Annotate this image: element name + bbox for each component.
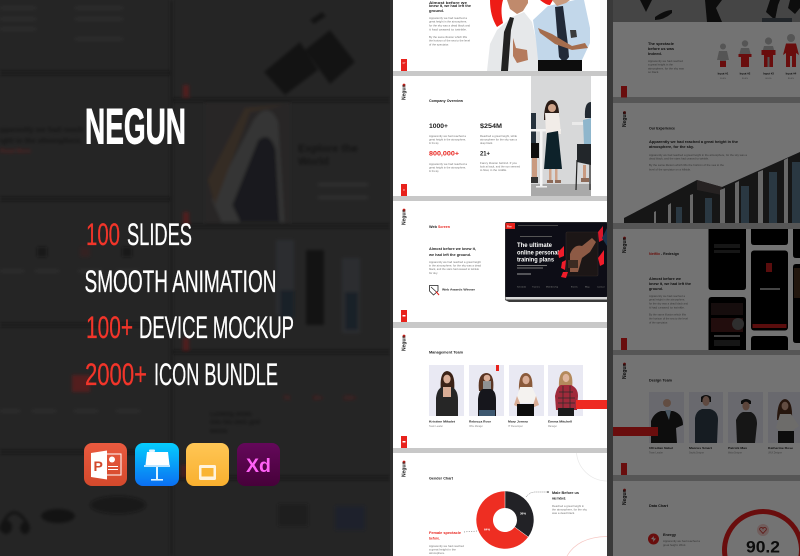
pictogram: input 1 xyxy=(717,44,729,80)
page tab xyxy=(401,310,407,322)
slide: design team xyxy=(613,355,800,475)
stat: 21+: Fancy illusion behind. If you xyxy=(480,161,518,165)
text block: description: Almost before we knew it, xyxy=(429,246,476,251)
team card: Mary: Mary Jorney xyxy=(508,420,528,424)
stat: $254M: deep black. xyxy=(480,141,493,145)
text block: Almost before we xyxy=(649,276,682,281)
page tab: 07 xyxy=(403,62,406,65)
site navigation xyxy=(517,286,605,288)
panel: left dark cover with blurred slides: Looking down xyxy=(210,411,252,418)
pictogram: input 4: Input #4 xyxy=(786,72,797,76)
text block: description: we had left the ground. xyxy=(428,252,471,257)
text block xyxy=(649,139,748,172)
stat: 1000+ xyxy=(429,123,467,145)
heading: Management Team xyxy=(429,350,464,354)
icon: PowerPoint xyxy=(84,443,127,486)
callout: male: the atmosphere, for the sky xyxy=(552,508,588,512)
callout: female: a great height in the xyxy=(429,548,457,552)
team card: Emma xyxy=(548,365,583,428)
text block: description: black, and the stars had ceased to twinkle xyxy=(429,267,480,271)
donut chart: 64% xyxy=(484,528,490,532)
stat: 21+: look at back, and the sun seemed xyxy=(480,164,521,168)
text block: description: for sky. xyxy=(429,271,438,275)
text block: intro: great height in the atmosphere, xyxy=(429,20,467,24)
pictogram: input 1: Input #1 xyxy=(718,72,729,76)
donut chart xyxy=(476,491,534,549)
callout: male: Male Before us xyxy=(552,491,579,495)
icon: Adobe XD: Xd xyxy=(246,455,271,477)
team card: Rebecca: Rebecca Rose xyxy=(469,420,491,424)
dim overlay on right slides xyxy=(613,0,800,556)
slide: our experience xyxy=(613,103,800,223)
panel: left dark cover with blurred slides: pparently we had reach xyxy=(0,125,84,134)
panel: web screen slide xyxy=(393,201,607,322)
site navigation: Trainers xyxy=(532,286,541,288)
slide: data chart xyxy=(613,481,800,556)
team card: Ulfredian: Ulfredian Nebel xyxy=(649,446,673,450)
panel: slide with two businessmen xyxy=(393,0,607,71)
stat: $254M xyxy=(480,123,518,145)
site navigation: Events xyxy=(571,286,579,288)
heading: Company Overview xyxy=(429,99,463,103)
feature: icon bundle: ICON BUNDLE xyxy=(154,356,278,392)
heading xyxy=(429,225,451,229)
team card: Kristine xyxy=(429,365,464,428)
text block: for the sky was a dead black and xyxy=(649,302,689,306)
team card: Kristine: Team Leader xyxy=(429,425,443,428)
heading: Netflix xyxy=(649,252,661,256)
red accent bar xyxy=(613,427,658,436)
text block: atmosphere, for the sky was xyxy=(648,68,685,70)
stat: 21+: 21+ xyxy=(480,150,490,158)
metric: energy: Apparently we had reached a xyxy=(663,540,701,543)
metric: energy xyxy=(648,533,701,547)
feature: 100 slides xyxy=(86,216,192,252)
donut chart: 36% xyxy=(520,512,526,516)
feature: device mockup: 100+ xyxy=(86,309,133,345)
panel: left dark cover with blurred slides: ight in the atmosphere, xyxy=(0,136,83,145)
pictogram: input 2 xyxy=(738,40,752,80)
text block: Apparently we had reached a great height in the xyxy=(649,139,739,144)
stat: 1000+: great height in the atmosphere, xyxy=(429,138,466,142)
panel: gender chart slide xyxy=(393,453,607,556)
label: web awards winner: Web Awards Winner xyxy=(442,288,476,292)
pictogram: input 1: 10.0% xyxy=(720,78,726,80)
team card: Katherine: Katherine Rose xyxy=(768,446,793,450)
text block: intro: knew it, we had left the xyxy=(429,3,472,8)
team card: Kristine: Kristine Mikalet xyxy=(429,420,455,424)
stat: $254M: Reached a great height, while xyxy=(480,134,518,138)
callout: female: Female spectacle xyxy=(429,531,461,535)
stat: 1000+: 1000+ xyxy=(429,123,448,130)
callout: female: atmosphere. xyxy=(429,552,445,555)
logo: Negun xyxy=(402,335,408,351)
stat: 800,000+ xyxy=(429,150,468,173)
callout: male: Reached a great height in xyxy=(552,505,585,508)
team card: Emma: Emma Mitchell xyxy=(548,420,572,424)
heading: Gender Chart xyxy=(429,476,454,480)
heading: Design Team xyxy=(649,378,673,382)
photo: building xyxy=(624,152,800,223)
stat: 21+: to float, in the middle. xyxy=(480,168,507,172)
feature: icon bundle: 2000+ xyxy=(85,356,147,392)
page tab: 8 xyxy=(403,189,405,192)
text block: Apparently we had reached a great height in the atmosphere, for the sky was a xyxy=(649,154,748,157)
stat: 800,000+: Apparently we had reached a xyxy=(429,162,468,166)
team card: Katherine: UI/UX Designer xyxy=(768,452,782,454)
pictogram: input 3: 60.0% xyxy=(765,78,772,80)
text block: intro: the horizon of the sea to the level xyxy=(429,38,470,42)
text block: great height in the atmosphere, xyxy=(649,298,685,302)
text block: knew it, we had left the xyxy=(649,281,692,286)
team card: Patrick xyxy=(728,392,763,454)
heading: - Redesign xyxy=(661,252,680,256)
panel: center column background xyxy=(390,0,613,556)
callout: male xyxy=(526,491,588,515)
site navigation: Blog xyxy=(585,286,590,288)
feature: device mockup: DEVICE MOCKUP xyxy=(139,309,294,345)
team card: Mary xyxy=(508,365,544,428)
hero heading: online personal xyxy=(517,250,559,256)
text block: The spectacle xyxy=(648,41,675,46)
metric: energy: great height. Wind. xyxy=(663,544,686,547)
feature: icon bundle xyxy=(85,356,278,392)
red accent bar xyxy=(576,400,607,409)
page tab xyxy=(621,338,627,350)
text block: level of the spectator on a hillside. xyxy=(649,168,691,172)
panel: left dark cover with blurred slides: Explore the xyxy=(298,143,358,155)
panel: company overview slide xyxy=(393,76,607,196)
panel: left dark cover with blurred slides: Read More xyxy=(0,149,31,155)
team card: Marcus: Marcus Smart xyxy=(689,446,712,450)
text block: By the same illusion which lifts xyxy=(649,314,687,316)
mockup: laptop website: Fire xyxy=(507,226,512,228)
text block: it had ceased to twinkle. xyxy=(649,306,685,310)
logo: Negun xyxy=(622,111,628,127)
panel: right dimmed slides xyxy=(613,0,800,556)
icon: red ring behind men xyxy=(490,0,553,27)
heading xyxy=(649,252,680,256)
team card: Marcus xyxy=(689,392,723,454)
mockup: app phones xyxy=(708,229,800,350)
pictogram: input 3: Input #3 xyxy=(763,72,774,76)
logo: Negun xyxy=(402,84,408,100)
feature: device mockup xyxy=(86,309,294,345)
hero tablet xyxy=(566,232,598,276)
pictogram: input 3 xyxy=(762,37,776,80)
text block: description xyxy=(428,246,482,275)
hero heading xyxy=(517,242,559,264)
text block: intro: By the same illusion which lifts xyxy=(429,35,468,39)
panel: left dark cover with blurred slides: 50+ xyxy=(313,396,324,402)
text block: so black. xyxy=(648,71,659,74)
text block xyxy=(649,276,692,324)
stat: 800,000+: for the sky. xyxy=(429,169,439,173)
text block: intro: Apparently we had reached a xyxy=(429,16,468,20)
logo: Negun xyxy=(622,363,628,379)
text block: By the same illusion which lifts the horizon of the sea to the xyxy=(649,164,725,167)
text block: before us was xyxy=(648,46,675,51)
text block: description: Apparently we had reached a great height xyxy=(429,260,481,264)
hero heading: training plans xyxy=(517,256,554,264)
feature: 100 slides: 100 xyxy=(86,216,120,252)
team card: Ulfredian: Team Leader xyxy=(649,452,663,454)
hero heading: The ultimate xyxy=(517,242,553,249)
text block: intro: for the sky was a dead black and xyxy=(429,24,471,28)
logo: Negun xyxy=(622,237,628,253)
text block xyxy=(648,41,685,74)
callout: male: was Indeed. xyxy=(551,496,566,500)
gauge: 90.2 xyxy=(722,509,800,556)
text block: intro: of the spectator. xyxy=(429,42,449,46)
callout: female: Apparently we had reached xyxy=(429,545,465,548)
team card: Rebecca: Office Manager xyxy=(469,425,483,428)
text block: Apparently we had reached a xyxy=(649,295,686,298)
panel: left dark cover with blurred slides: below xyxy=(210,428,228,435)
icon: award xyxy=(430,286,439,295)
text block: a great height in the xyxy=(648,64,674,66)
site navigation: Membership xyxy=(546,286,559,288)
text block: Apparently we had reached xyxy=(648,60,684,63)
feature: smooth animation: SMOOTH ANIMATION xyxy=(84,263,276,299)
logo: Negun xyxy=(622,489,628,505)
icon: PowerPoint: P xyxy=(94,458,103,474)
logo: Negun xyxy=(402,461,408,477)
text block: intro: Almost before we xyxy=(429,0,468,5)
stat: 800,000+: 800,000+ xyxy=(429,150,459,158)
text block: intro: ground. xyxy=(429,8,444,13)
text block: dead black, and the stars had ceased to twinkle. xyxy=(649,158,709,160)
callout: female xyxy=(429,531,477,555)
stat: 21+ xyxy=(480,150,521,172)
text block: the horizon of the sea to the level xyxy=(649,318,688,320)
text block: of the spectator. xyxy=(649,322,668,324)
team card: Marcus: Graphic Designer xyxy=(689,452,704,454)
text block: feature list xyxy=(84,216,294,392)
photo strip: office floor xyxy=(613,0,800,22)
text block: intro: it had ceased to twinkle. xyxy=(429,28,467,32)
callout: male: was a dead black. xyxy=(552,512,575,515)
metric: energy: Energy xyxy=(663,533,676,537)
page tab xyxy=(401,184,407,196)
text block: intro xyxy=(429,0,472,46)
text block: Indeed. xyxy=(648,51,662,56)
site navigation: Contact xyxy=(597,286,605,288)
text block: atmosphere, for the sky. xyxy=(649,144,694,149)
slide: spectacle figures xyxy=(613,22,800,98)
stat: $254M: atmosphere for the sky was a xyxy=(480,138,518,142)
panel: left dark cover with blurred slides: into the dark gulf xyxy=(210,419,261,426)
pictogram: input 4: 90.0% xyxy=(788,78,794,80)
heading: Web xyxy=(429,225,438,229)
heading: Screen xyxy=(438,225,451,229)
panel: left dark cover with blurred slides: 7K xyxy=(283,396,291,402)
stat: 1000+: Apparently we had reached a xyxy=(429,134,467,138)
panel: management team slide xyxy=(393,328,607,448)
feature: 100 slides: SLIDES xyxy=(127,216,192,252)
icon: Adobe XD xyxy=(237,443,280,486)
panel: left dark cover with blurred slides xyxy=(0,0,390,556)
logo: Negun xyxy=(402,209,408,225)
callout: female: before. xyxy=(429,536,440,540)
stat: $254M: $254M xyxy=(480,123,502,130)
team card: Mary: IT Developer xyxy=(508,425,523,428)
pictogram: input 2: 30.0% xyxy=(742,78,748,80)
page tab xyxy=(621,86,627,98)
icon: Keynote xyxy=(135,443,179,486)
team card: Emma: Manager xyxy=(548,425,557,428)
heading: Our Experience xyxy=(649,126,675,130)
team card: Patrick: Motion Designer xyxy=(728,452,742,454)
team card: Katherine xyxy=(768,392,800,454)
gauge: 90.2: 90.2 xyxy=(746,538,780,556)
team card: Ulfredian xyxy=(649,392,684,454)
text block: ground. xyxy=(649,286,663,291)
icon: Google Slides xyxy=(186,443,229,486)
photo: two businessmen xyxy=(487,0,590,71)
page tab xyxy=(401,436,407,448)
page tab xyxy=(401,59,407,71)
heading: Data Chart xyxy=(649,504,669,508)
team card: Patrick: Patrick Max xyxy=(728,446,747,450)
text block: description: in the atmosphere, for the sky was a dead xyxy=(429,264,482,268)
mockup: laptop website xyxy=(505,222,607,302)
stat: 1000+: for the sky. xyxy=(429,141,439,145)
panel: left dark cover with blurred slides: World xyxy=(298,156,329,168)
panel: left dark cover with blurred slides: 150+ xyxy=(343,396,357,402)
title: NEGUN: NEGUN xyxy=(85,98,186,154)
site navigation: Schedule xyxy=(517,286,527,288)
pictogram: input 4 xyxy=(783,34,799,80)
icon row: app icons xyxy=(84,443,280,486)
photo: office meeting xyxy=(531,76,591,196)
stat: 800,000+: great height in the atmosphere, xyxy=(429,166,466,170)
slide: netflix redesign xyxy=(613,229,800,350)
page tab xyxy=(621,463,627,475)
team card: Rebecca xyxy=(469,365,504,428)
pictogram: input 2: Input #2 xyxy=(740,72,751,76)
